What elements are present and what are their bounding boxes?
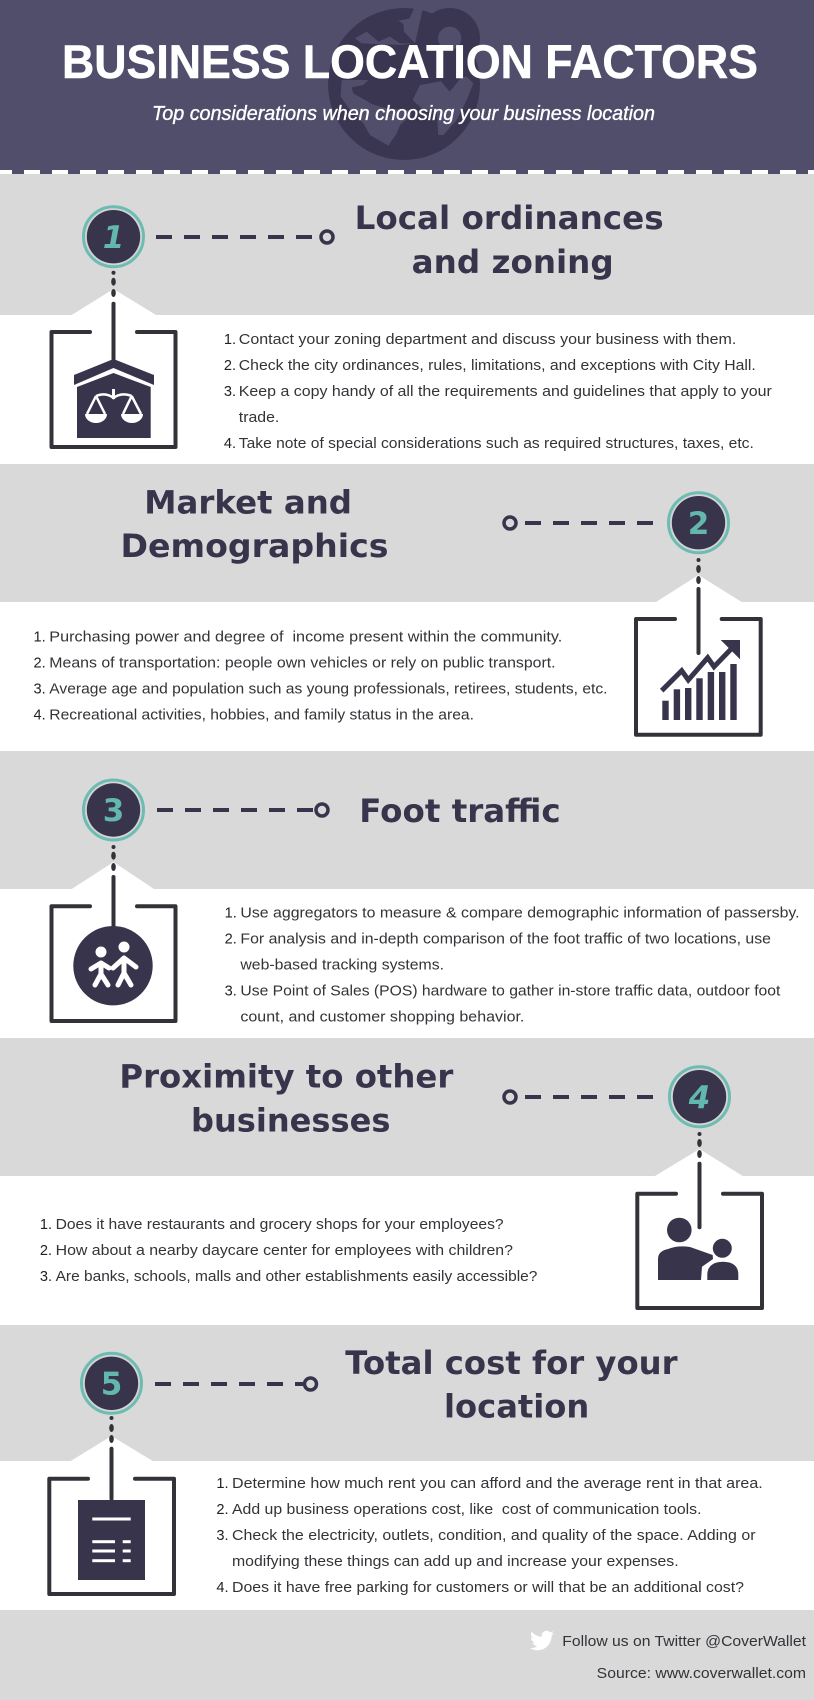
text list: Check the electricity, outlets, condition, and quality of the space. Adding or [232,1528,756,1544]
number badge 5 [82,1353,142,1413]
text list: 4. [34,707,46,723]
text list: 4. [224,436,236,452]
heading: businesses [191,1101,390,1139]
icon frame [637,1194,762,1308]
text list [225,906,800,1026]
text list: Contact your zoning department and discuss your business with them. [239,332,736,348]
panel: section 1 local ordinances [0,174,814,464]
text list [40,1217,537,1285]
text list: Does it have restaurants and grocery shops for your employees? [56,1217,504,1233]
text list: 1. [225,906,237,922]
heading [345,1344,678,1426]
text list: Average age and population such as young professionals, retirees, students, etc. [49,681,608,697]
vertical dotted connector [696,558,701,655]
icon frame [52,906,176,1021]
icon frame [636,619,761,735]
heading: Proximity to other [119,1058,454,1096]
dashed connector [155,1378,316,1390]
source text: Source: www.coverwallet.com [597,1666,806,1682]
vertical dotted connector [111,271,116,362]
number badge 2 [668,493,728,553]
text list: 1. [216,1476,228,1492]
subtitle: Top considerations when choosing your business location [152,103,655,125]
number badge 1: 1 [103,220,124,256]
text list: For analysis and in-depth comparison of the foot traffic of two locations, use [240,932,771,948]
text list: 3. [225,984,237,1000]
text list: modifying these things can add up and increase your expenses. [232,1554,679,1570]
text list [216,1476,763,1596]
title: BUSINESS LOCATION FACTORS [62,35,758,88]
heading [355,199,664,281]
text list: Take note of special considerations such as required structures, taxes, etc. [239,436,754,452]
text list: 1. [224,332,236,348]
text list: count, and customer shopping behavior. [240,1010,524,1026]
vertical dotted connector [109,1416,114,1501]
text list: 2. [225,932,237,948]
text list [224,332,772,452]
text list: 2. [40,1243,52,1259]
heading: Local ordinances [355,199,664,237]
text list: 2. [216,1502,228,1518]
text list: Recreational activities, hobbies, and family status in the area. [49,707,474,723]
text list: trade. [239,410,279,426]
text list: 4. [216,1580,228,1596]
heading: Foot traffic [359,792,561,830]
text list: 1. [40,1217,52,1233]
text list: Determine how much rent you can afford and the average rent in that area. [232,1476,763,1492]
icon: courthouse with scales [74,359,154,438]
follow us text: Follow us on Twitter @CoverWallet [562,1634,806,1650]
heading [120,484,388,565]
heading: and zoning [412,243,614,281]
text list: Use aggregators to measure & compare demographic information of passersby. [240,906,800,922]
heading: Demographics [120,527,388,565]
icon frame [49,1479,174,1594]
number badge 1 [84,207,144,267]
text list: 1. [34,629,46,645]
panel: section 3 foot traffic [0,751,814,1038]
number badge 4: 4 [688,1080,710,1116]
heading: Market and [144,484,352,522]
text list: Add up business operations cost, like cost of communication tools. [232,1502,702,1518]
icon: document [78,1500,145,1580]
text list: web-based tracking systems. [239,958,444,974]
dashed connector [504,517,653,529]
dashed connector [156,231,333,243]
text list: 3. [224,384,236,400]
icon: twitter bird [530,1631,554,1650]
dashed connector [504,1091,653,1103]
text list: Use Point of Sales (POS) hardware to gather in-store traffic data, outdoor foot [240,984,780,1000]
text list: 2. [224,358,236,374]
panel: header [0,0,814,174]
icon: rising bar chart [662,640,740,720]
text list: 2. [34,655,46,671]
text list: Purchasing power and degree of income present within the community. [49,629,562,645]
text list: 3. [34,681,46,697]
text list [34,629,607,723]
heading [119,1058,454,1139]
text list: How about a nearby daycare center for employees with children? [56,1243,513,1259]
heading: location [444,1388,589,1426]
text list: Keep a copy handy of all the requirements and guidelines that apply to your [239,384,772,400]
panel: section 5 total cost [0,1325,814,1610]
text list: Does it have free parking for customers or will that be an additional cost? [232,1580,744,1596]
text list: Check the city ordinances, rules, limitations, and exceptions with City Hall. [239,358,756,374]
vertical dotted connector [111,845,116,929]
text list: Means of transportation: people own vehicles or rely on public transport. [49,655,556,671]
number badge 4 [670,1067,730,1127]
panel: section 4 proximity [0,1038,814,1325]
icon: walking people [73,926,153,1005]
icon: adult and child [658,1218,738,1280]
icon: globe and map pin [328,7,480,160]
dashed connector [157,804,328,816]
vertical dotted connector [697,1132,702,1229]
icon frame [52,332,176,447]
text list: 3. [216,1528,228,1544]
number badge 5: 5 [101,1366,122,1402]
number badge 2: 2 [688,506,709,542]
text list: 3. [40,1269,52,1285]
number badge 3: 3 [103,793,124,829]
panel: footer [0,1610,814,1700]
text list: Are banks, schools, malls and other establishments easily accessible? [56,1269,537,1285]
panel: section 2 market and demographics [0,464,814,751]
number badge 3 [84,780,144,840]
heading: Total cost for your [345,1344,678,1382]
